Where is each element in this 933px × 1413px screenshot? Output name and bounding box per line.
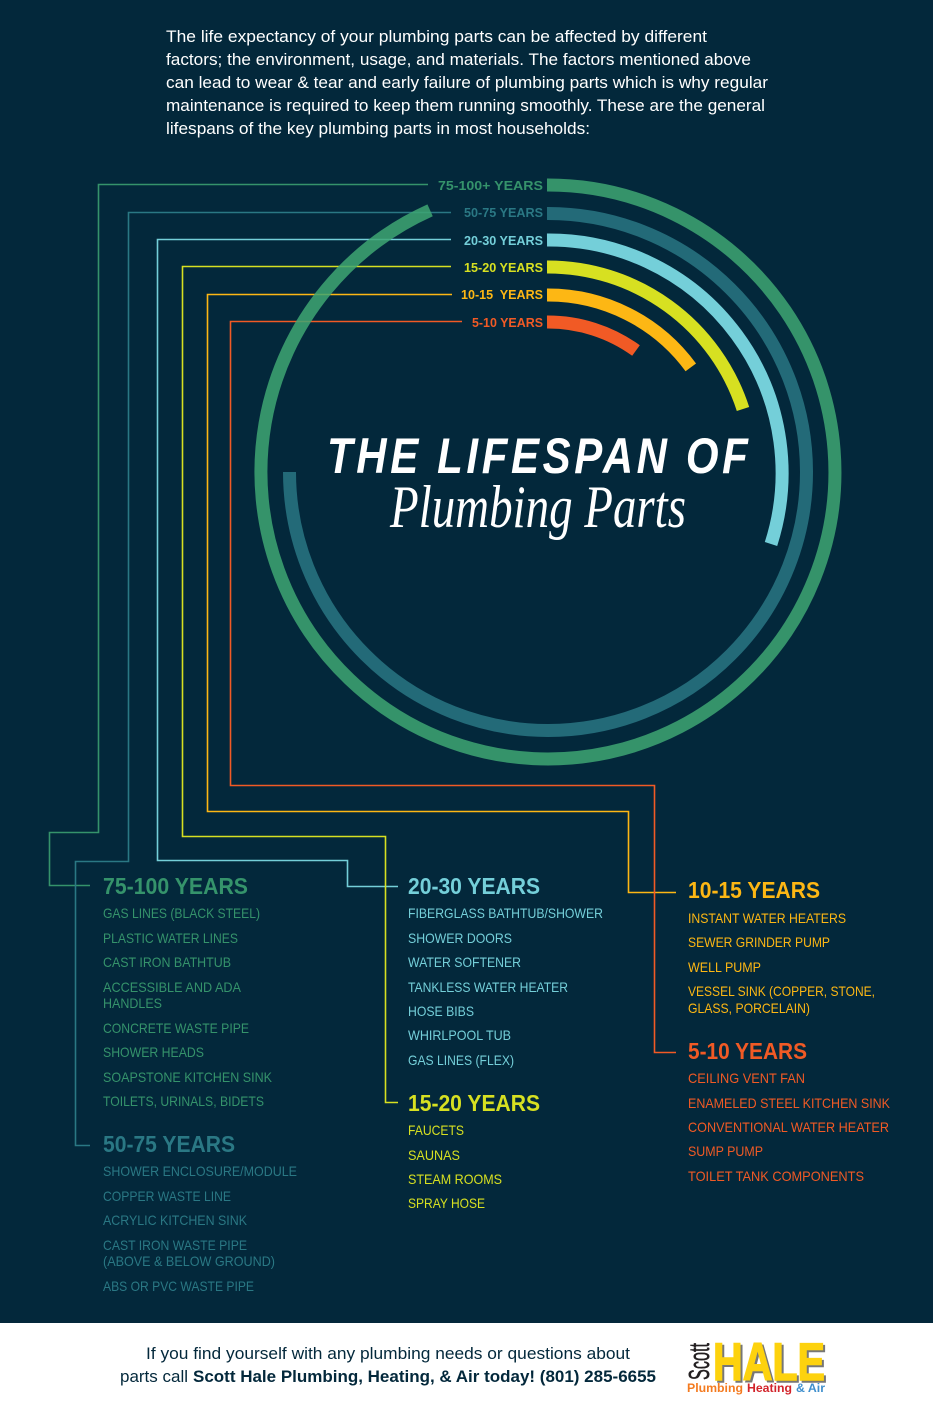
list: 20-30 years: FIBERGLASS BATHTUB/SHOWER [408,905,603,921]
footer [0,1323,933,1413]
connector: 50-75 years [76,212,451,1146]
list: 75-100 years: GAS LINES (BLACK STEEL) [103,905,260,921]
list: 50-75 years: COPPER WASTE LINE [103,1188,231,1204]
ring chart [261,185,835,759]
list: 10-15 years: VESSEL SINK (COPPER, STONE, [688,983,875,999]
connector: 5-10 years [230,322,676,1052]
title: THE LIFESPAN OF [327,428,749,484]
ring: 75-100+ years [261,185,835,759]
connector: 20-30 years [158,240,451,886]
intro text: maintenance is required to keep them running smoothly. These are the general [166,96,765,115]
logo: Scott Hale: & Air [796,1381,825,1395]
list: 50-75 years: SHOWER ENCLOSURE/MODULE [103,1163,297,1179]
list: 5-10 years: SUMP PUMP [688,1143,763,1159]
footer call to action: Scott Hale Plumbing, Heating, & Air today! (801) 285-6655 [193,1367,656,1386]
list: 20-30 years: WATER SOFTENER [408,954,521,970]
ring labels: 50-75 YEARS [464,205,543,220]
list: 50-75 years: 50-75 YEARS [103,1131,235,1157]
list: 15-20 years: SAUNAS [408,1147,460,1163]
list: 5-10 years [688,1038,891,1184]
list: 50-75 years: (ABOVE & BELOW GROUND) [103,1253,275,1269]
footer call to action: If you find yourself with any plumbing needs or questions about [146,1344,630,1363]
intro text: The life expectancy of your plumbing parts can be affected by different [166,27,707,46]
list: 50-75 years: ABS OR PVC WASTE PIPE [103,1278,254,1294]
ring labels: 75-100+ YEARS [438,178,543,193]
list: 20-30 years: WHIRLPOOL TUB [408,1027,511,1043]
ring: 5-10 years [547,322,636,350]
list: 20-30 years: TANKLESS WATER HEATER [408,979,568,995]
list: 15-20 years: STEAM ROOMS [408,1171,502,1187]
list: 10-15 years: SEWER GRINDER PUMP [688,934,830,950]
connector: 10-15 years [208,294,676,892]
ring: 50-75 years [290,213,806,730]
intro text: can lead to wear & tear and early failure of plumbing parts which is why regular [166,73,768,92]
ring: 15-20 years [547,267,743,409]
list: 50-75 years [103,1131,297,1294]
footer call to action: parts call [120,1367,188,1386]
list: 20-30 years: SHOWER DOORS [408,930,512,946]
list: 5-10 years: CONVENTIONAL WATER HEATER [688,1119,889,1135]
list: 15-20 years: FAUCETS [408,1122,464,1138]
list: 20-30 years [408,873,603,1068]
list: 5-10 years: CEILING VENT FAN [688,1070,805,1086]
list: 10-15 years: GLASS, PORCELAIN) [688,1000,810,1016]
logo: Scott Hale: Heating [747,1381,792,1395]
ring labels: 20-30 YEARS [464,233,543,248]
list: 20-30 years: HOSE BIBS [408,1003,474,1019]
title: Plumbing Parts [389,474,686,540]
list: 10-15 years [688,877,875,1016]
list: 15-20 years [408,1090,540,1211]
list: 15-20 years: 15-20 YEARS [408,1090,540,1116]
list: 50-75 years: CAST IRON WASTE PIPE [103,1237,247,1253]
list: 20-30 years: GAS LINES (FLEX) [408,1052,514,1068]
intro text: lifespans of the key plumbing parts in most households: [166,119,590,138]
list: 75-100 years: HANDLES [103,995,162,1011]
logo: Scott Hale: Plumbing [687,1381,743,1395]
ring labels: 5-10 YEARS [472,315,543,330]
connector: 75-100 years [50,184,428,886]
intro text [166,27,768,138]
list: 5-10 years: TOILET TANK COMPONENTS [688,1168,864,1184]
list: 10-15 years: WELL PUMP [688,959,761,975]
list: 10-15 years: 10-15 YEARS [688,877,820,903]
ring: 20-30 years [547,240,782,544]
list: 20-30 years: 20-30 YEARS [408,873,540,899]
list: 75-100 years [103,873,273,1109]
logo: Scott Hale: Scott [684,1343,716,1380]
list: 5-10 years: 5-10 YEARS [688,1038,807,1064]
list: 75-100 years: CAST IRON BATHTUB [103,954,231,970]
ring: 10-15 years [547,295,691,367]
footer call to action [120,1344,656,1386]
list: 75-100 years: ACCESSIBLE AND ADA [103,979,242,995]
list: 10-15 years: INSTANT WATER HEATERS [688,910,846,926]
list: 75-100 years: 75-100 YEARS [103,873,248,899]
logo: Scott Hale: HALE [713,1333,825,1392]
title [327,428,749,540]
ring labels: 15-20 YEARS [464,260,543,275]
list: 5-10 years: ENAMELED STEEL KITCHEN SINK [688,1095,891,1111]
list: 75-100 years: PLASTIC WATER LINES [103,930,238,946]
ring labels: 10-15 YEARS [461,287,543,302]
logo: Scott Hale [684,1333,827,1395]
list: 75-100 years: SOAPSTONE KITCHEN SINK [103,1069,273,1085]
list: 75-100 years: TOILETS, URINALS, BIDETS [103,1093,264,1109]
intro text: factors; the environment, usage, and materials. The factors mentioned above [166,50,751,69]
connector lines [50,184,676,1146]
logo: Scott Hale: HALE [715,1335,827,1394]
list: 75-100 years: CONCRETE WASTE PIPE [103,1020,249,1036]
list: 15-20 years: SPRAY HOSE [408,1195,485,1211]
connector: 15-20 years [182,266,451,1102]
list: 50-75 years: ACRYLIC KITCHEN SINK [103,1212,248,1228]
ring labels [438,178,543,330]
list: 75-100 years: SHOWER HEADS [103,1044,204,1060]
